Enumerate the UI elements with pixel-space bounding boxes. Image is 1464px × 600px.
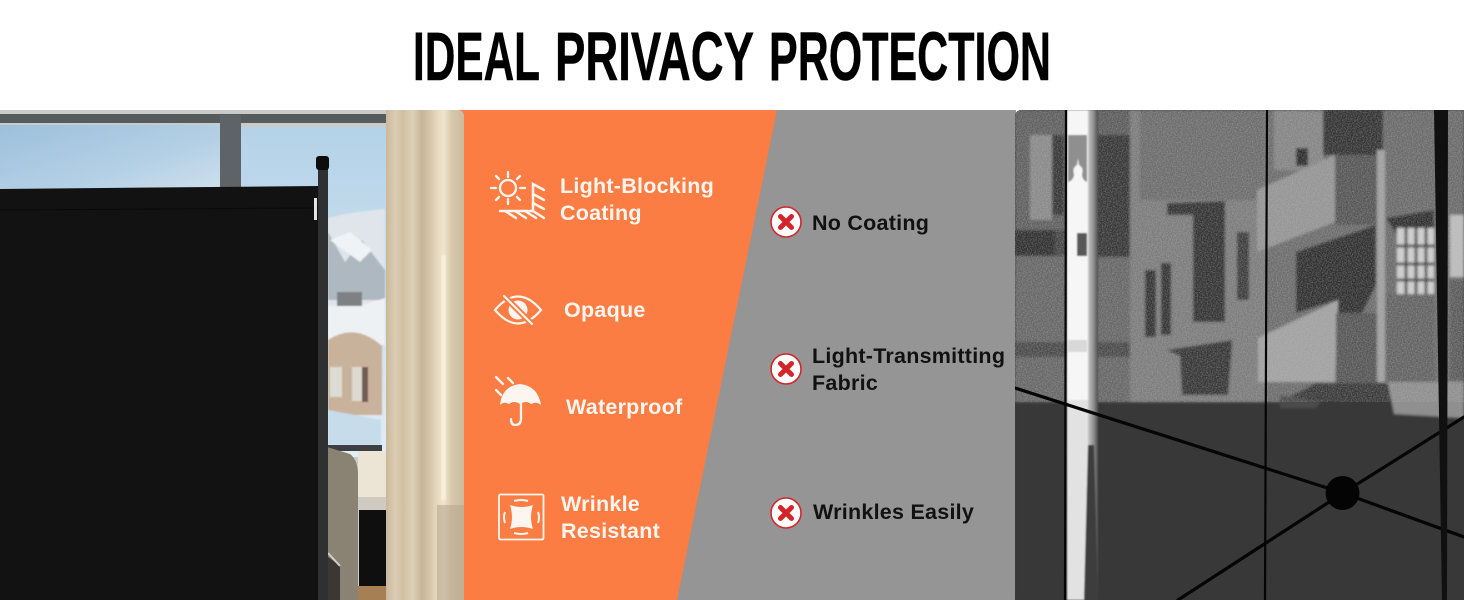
text: Light-Blocking Coating: Light-Blocking (560, 174, 714, 198)
screen pole (318, 158, 328, 600)
icon: red cross 1 (771, 207, 801, 237)
icon: red cross 2 (771, 354, 801, 384)
text: Wrinkle Resistant: Resistant (561, 519, 660, 543)
text: Wrinkle Resistant: Wrinkle (561, 492, 640, 516)
icon: sun and coating (491, 172, 544, 218)
icon: umbrella with rain (496, 377, 541, 425)
mountain (328, 209, 385, 445)
text: Wrinkles Easily: Wrinkles Easily (813, 500, 974, 524)
panel: orange feature wedge (455, 110, 777, 600)
icon: wrinkle resistant square (499, 494, 544, 540)
title: PROTECTION (769, 18, 1051, 95)
text: Light-Transmitting Fabric: Fabric (812, 371, 878, 395)
centre hub (1326, 476, 1360, 510)
text: Opaque: Opaque (564, 298, 646, 322)
dark box (359, 510, 392, 586)
black fabric (0, 186, 318, 600)
text: No Coating: No Coating (812, 211, 929, 235)
dark ground (1015, 382, 1464, 422)
text: Light-Blocking Coating: Coating (560, 201, 642, 225)
title (413, 18, 1051, 95)
curtain (386, 110, 464, 600)
text: Waterproof: Waterproof (566, 395, 683, 419)
frame wires (1015, 110, 1464, 600)
white pole (1067, 110, 1098, 600)
sofa (327, 447, 358, 600)
text: Light-Transmitting Fabric: Light-Transmitting (812, 344, 1005, 368)
panel: see-through fabric photo (1015, 110, 1464, 600)
title: PRIVACY (555, 18, 754, 95)
title: IDEAL (413, 18, 540, 95)
building (328, 298, 385, 345)
icon: red cross 3 (771, 498, 801, 528)
blurred building through the fabric (1015, 110, 1464, 420)
panel: grey comparison background (600, 110, 1016, 600)
panel: room photo with black privacy screen (0, 110, 464, 600)
noise (1015, 110, 1464, 402)
icon: crossed-out eye (495, 296, 541, 324)
